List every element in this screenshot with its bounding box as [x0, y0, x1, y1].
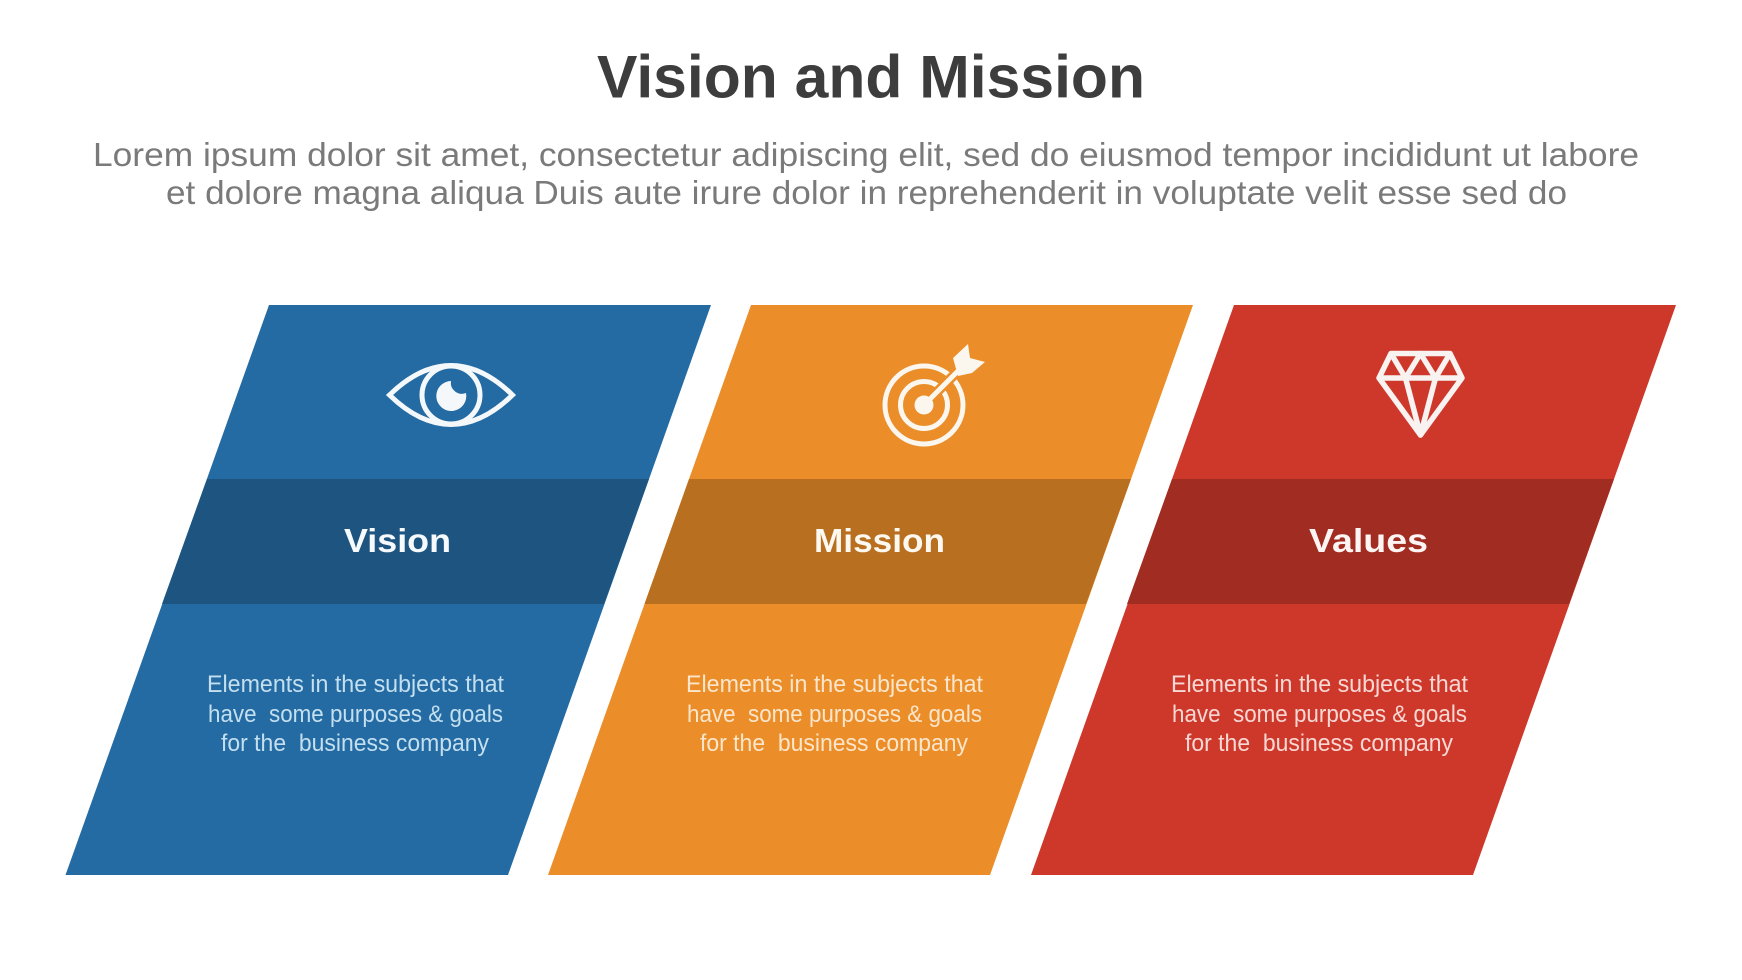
icon: target with arrow: [885, 344, 985, 444]
mission parallelogram background: [548, 305, 1193, 875]
values heading: Values: [1309, 522, 1428, 559]
panel: vision: [66, 305, 711, 875]
vision description: for the business company: [221, 730, 489, 757]
panel: values: [1031, 305, 1676, 875]
mission description: for the business company: [700, 730, 968, 757]
values heading band: [1127, 479, 1614, 604]
icon: diamond: [1379, 354, 1462, 435]
vision heading: Vision: [344, 522, 451, 559]
mission heading band: [644, 479, 1131, 604]
title: Vision and Mission: [597, 44, 1145, 110]
mission description: Elements in the subjects that: [686, 671, 983, 698]
panel: mission: [548, 305, 1193, 875]
vision description: have some purposes & goals: [208, 701, 503, 728]
mission description: [686, 671, 983, 757]
vision heading band: [162, 479, 649, 604]
vision parallelogram background: [66, 305, 711, 875]
values description: [1171, 671, 1468, 757]
icon: eye: [390, 366, 512, 424]
values description: Elements in the subjects that: [1171, 671, 1468, 698]
vision description: Elements in the subjects that: [207, 671, 504, 698]
subtitle text block: et dolore magna aliqua Duis aute irure dolor in reprehenderit in voluptate velit esse sed do: [166, 174, 1567, 211]
values description: have some purposes & goals: [1172, 701, 1467, 728]
values description: for the business company: [1185, 730, 1453, 757]
subtitle text block: [93, 136, 1639, 211]
mission heading: Mission: [814, 522, 945, 559]
values parallelogram background: [1031, 305, 1676, 875]
vision description: [207, 671, 504, 757]
subtitle text block: Lorem ipsum dolor sit amet, consectetur adipiscing elit, sed do eiusmod tempor incididunt ut labore: [93, 136, 1639, 173]
mission description: have some purposes & goals: [687, 701, 982, 728]
